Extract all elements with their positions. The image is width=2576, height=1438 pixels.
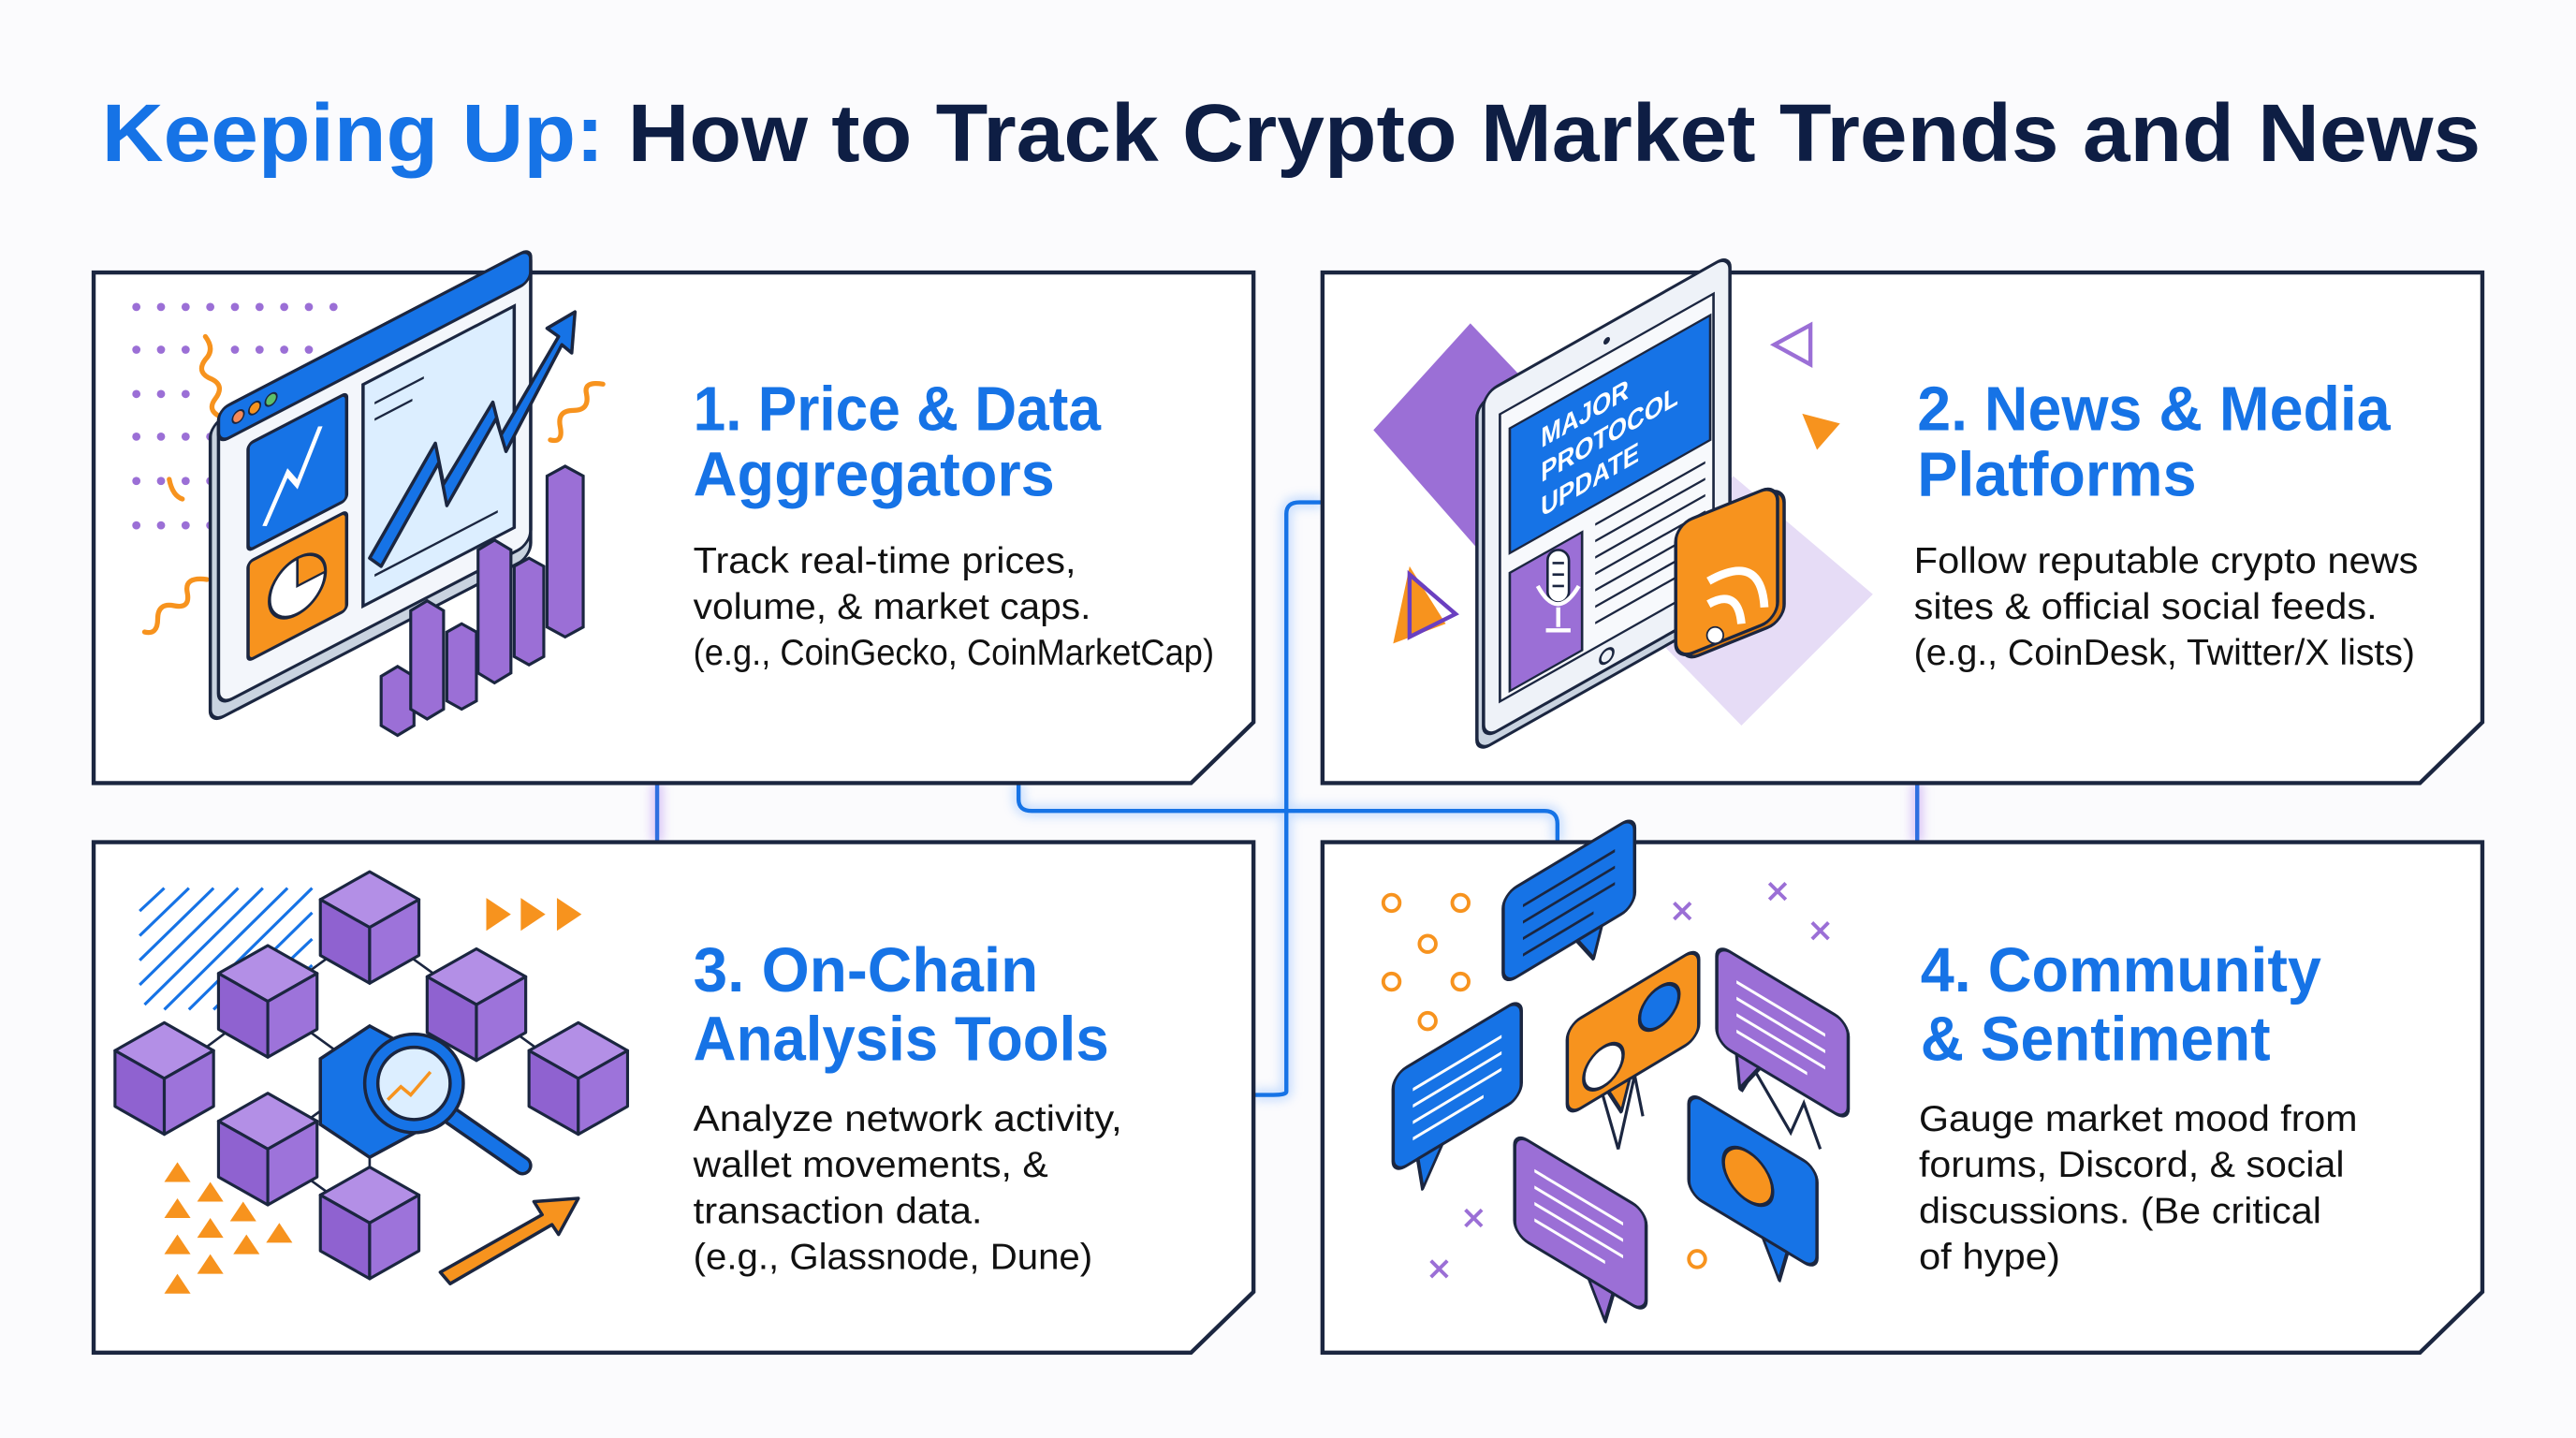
panel: news & media platforms: Platforms [1917, 441, 2197, 510]
body text [693, 1099, 1122, 1277]
panel: price & data aggregators [94, 248, 1253, 783]
body text: Analyze network activity, [694, 1099, 1122, 1139]
panel: community & sentiment [1323, 815, 2482, 1353]
squiggles [144, 336, 603, 633]
orange triangles [165, 1162, 292, 1294]
title: Keeping Up: How to Track Crypto Market Trends and News [102, 87, 2481, 179]
icon: arrow [440, 1198, 578, 1284]
triangles [1775, 325, 1810, 364]
icon: rss [1676, 484, 1784, 662]
body text: volume, & market caps. [694, 587, 1090, 627]
bars [381, 466, 583, 736]
heading: 2. News & Media [1917, 374, 2392, 444]
body text: Gauge market mood from [1919, 1099, 2358, 1139]
heading: 4. Community [1921, 936, 2321, 1005]
zigzag [1569, 1070, 1821, 1149]
body text: forums, Discord, & social [1919, 1145, 2345, 1185]
icon: microphone [1538, 550, 1579, 630]
body text: Follow reputable crypto news [1914, 541, 2419, 581]
decorative diamonds [1373, 323, 1569, 550]
heading: 3. On-Chain [694, 936, 1038, 1005]
body text: discussions. (Be critical [1919, 1191, 2321, 1231]
hatching [139, 888, 312, 1009]
icon: tablet [1477, 255, 1730, 753]
panel: on-chain analysis tools: Analysis Tools [694, 1005, 1109, 1075]
body text: (e.g., CoinGecko, CoinMarketCap) [694, 633, 1214, 673]
panel: community & sentiment: & Sentiment [1921, 1005, 2271, 1075]
body text: of hype) [1919, 1237, 2060, 1277]
play triangles [487, 898, 581, 931]
body text: (e.g., Glassnode, Dune) [694, 1237, 1092, 1277]
connector lines [657, 503, 1917, 1095]
circles and crosses [1383, 895, 1705, 1268]
body text: sites & official social feeds. [1914, 587, 2378, 627]
panel: price & data aggregators: Aggregators [694, 441, 1055, 510]
dot pattern [132, 303, 338, 529]
panel: news & media platforms: PROTOCOL [1541, 379, 1678, 489]
panel: news & media platforms [1323, 255, 2482, 783]
chat bubbles [1393, 815, 1848, 1346]
panel: news & media platforms: MAJOR [1541, 374, 1629, 455]
body text: transaction data. [694, 1191, 983, 1231]
body text [1919, 1099, 2358, 1277]
body text: wallet movements, & [693, 1145, 1048, 1185]
body text: Track real-time prices, [694, 541, 1076, 581]
cubes network [115, 872, 627, 1279]
panel: on-chain analysis tools [94, 843, 1253, 1353]
body text [1914, 541, 2419, 673]
heading: 1. Price & Data [694, 374, 1102, 444]
body text: (e.g., CoinDesk, Twitter/X lists) [1914, 633, 2415, 673]
icon: browser with chart [211, 248, 531, 724]
body text [694, 541, 1214, 673]
panel: news & media platforms: UPDATE [1541, 436, 1639, 523]
icon: magnifier [320, 1026, 522, 1166]
